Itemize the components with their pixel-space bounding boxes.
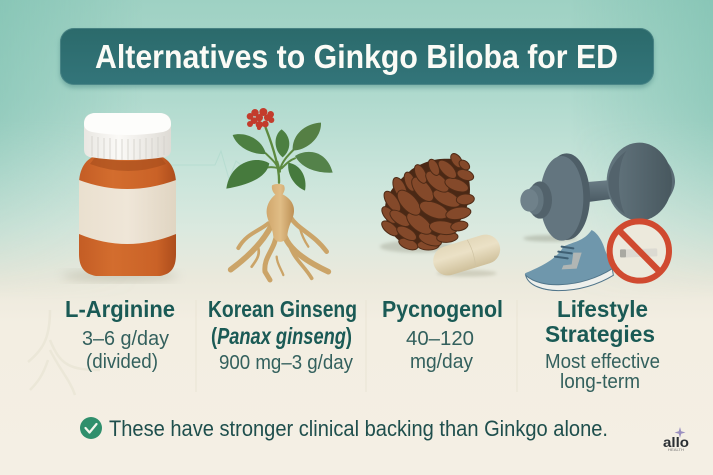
column: pycnogenol: Pycnogenol (382, 296, 503, 322)
ginseng leaves (226, 123, 333, 191)
column: pycnogenol: mg/day (410, 351, 473, 373)
no-smoking sign (610, 221, 669, 281)
icon: korean ginseng plant (226, 108, 333, 280)
column: l-arginine: L-Arginine (65, 296, 175, 322)
dumbbell (520, 143, 675, 242)
column: l-arginine: 3–6 g/day (82, 328, 169, 350)
column: korean ginseng: 900 mg–3 g/day (219, 352, 353, 374)
column: l-arginine: (divided) (86, 351, 158, 373)
logo: allo health: allo (663, 434, 689, 450)
logo: allo health: HEALTH (668, 448, 685, 452)
title banner (60, 28, 654, 88)
icon: capsule (430, 231, 504, 279)
column: korean ginseng: Korean Ginseng (208, 296, 357, 322)
column: lifestyle strategies: long-term (560, 371, 640, 393)
running shoe (525, 230, 613, 291)
column: l-arginine (65, 296, 175, 373)
icon: check mark (80, 417, 102, 439)
column: pycnogenol (382, 296, 503, 373)
ginseng stems (263, 128, 295, 183)
ginseng roots (231, 217, 328, 280)
column: lifestyle strategies (545, 296, 660, 393)
icon: pine cone (379, 151, 475, 253)
column dividers (196, 300, 517, 392)
callout: clinical backing note: These have stronger clinical backing than Ginkgo alone. (109, 416, 608, 441)
column: korean ginseng: (Panax ginseng) (211, 323, 352, 349)
icon: dumbbell, shoe and no-smoking sign (520, 143, 675, 291)
column: lifestyle strategies: Most effective (545, 351, 660, 373)
logo: allo health (663, 427, 689, 452)
column: lifestyle strategies: Strategies (545, 321, 655, 347)
icon: l-arginine bottle (62, 113, 178, 281)
column: lifestyle strategies: Lifestyle (557, 296, 648, 322)
ginseng berries (247, 108, 274, 130)
column: korean ginseng (208, 296, 357, 374)
column: pycnogenol: 40–120 (406, 328, 474, 350)
title text: Alternatives to Ginkgo Biloba for ED (95, 38, 618, 75)
